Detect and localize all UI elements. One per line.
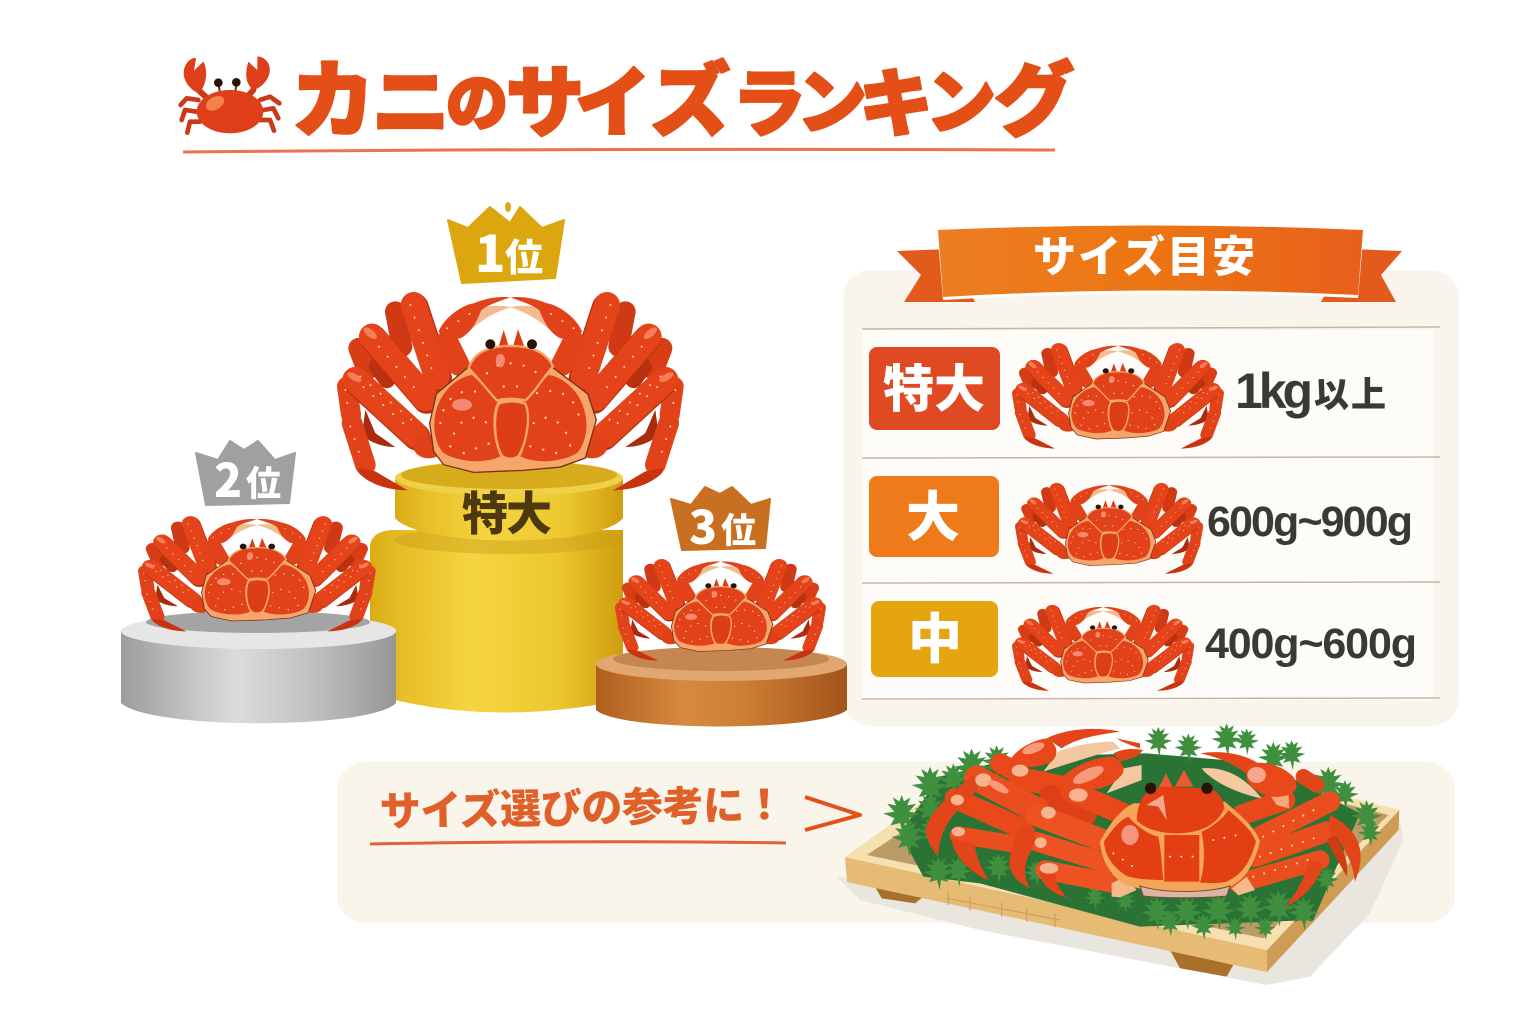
crown: 2位 [196, 441, 295, 511]
title: の [446, 53, 508, 143]
row: 中: 400g~600g [1205, 620, 1417, 668]
title: ズ [650, 37, 730, 153]
podium: silver 2nd place [121, 611, 396, 723]
crown: 3位: 3 [689, 492, 717, 558]
row: 特大 [869, 346, 1386, 449]
panel: size guide [843, 223, 1459, 726]
row: 特大: 1kg [1235, 363, 1313, 419]
callout text: サイズ選びの参考に！ [379, 771, 785, 838]
icon: title crab [181, 56, 279, 133]
crown: 2位: 2 [214, 445, 242, 511]
podium: gold 1st place [370, 460, 623, 712]
title: ラ [732, 45, 806, 152]
title: グ [994, 37, 1074, 153]
panel: bottom banner [337, 762, 1455, 923]
title: サ [506, 41, 584, 153]
ribbon: サイズ目安 [897, 223, 1402, 302]
row: 大: 600g~900g [1207, 498, 1413, 546]
podium: bronze 3rd place [596, 647, 847, 726]
row: 特大: 特大 [883, 348, 985, 422]
crown: 3位 [671, 487, 770, 558]
title [291, 34, 1074, 155]
row: 大 [869, 473, 1413, 574]
crown: 1位: 1 [475, 215, 505, 287]
crown: 1位: 位 [505, 227, 543, 282]
title: ン [926, 47, 996, 148]
arrow [805, 797, 860, 830]
crab: 1st place [345, 297, 675, 490]
title: キ [859, 45, 933, 152]
title: イ [575, 42, 651, 152]
title: ン [797, 47, 867, 148]
row: 特大: 以上 [1314, 367, 1386, 418]
row: 大: 大 [906, 473, 960, 552]
label: 特大 on podium: 特大 [462, 478, 552, 544]
crown: 2位: 位 [246, 456, 281, 507]
row: 中: 中 [908, 595, 962, 674]
crown: 1位 [448, 202, 564, 287]
crab: 2nd place [144, 519, 370, 631]
crown: 3位: 位 [721, 503, 756, 554]
illustration: crab on wooden tray [837, 723, 1403, 985]
ribbon: サイズ目安: サイズ目安 [1033, 223, 1255, 285]
title: カ [291, 34, 375, 155]
crab: 3rd place [620, 562, 821, 661]
title underline [183, 149, 1055, 152]
row: 中 [871, 595, 1417, 691]
title: ニ [372, 41, 450, 153]
callout underline [370, 842, 786, 844]
